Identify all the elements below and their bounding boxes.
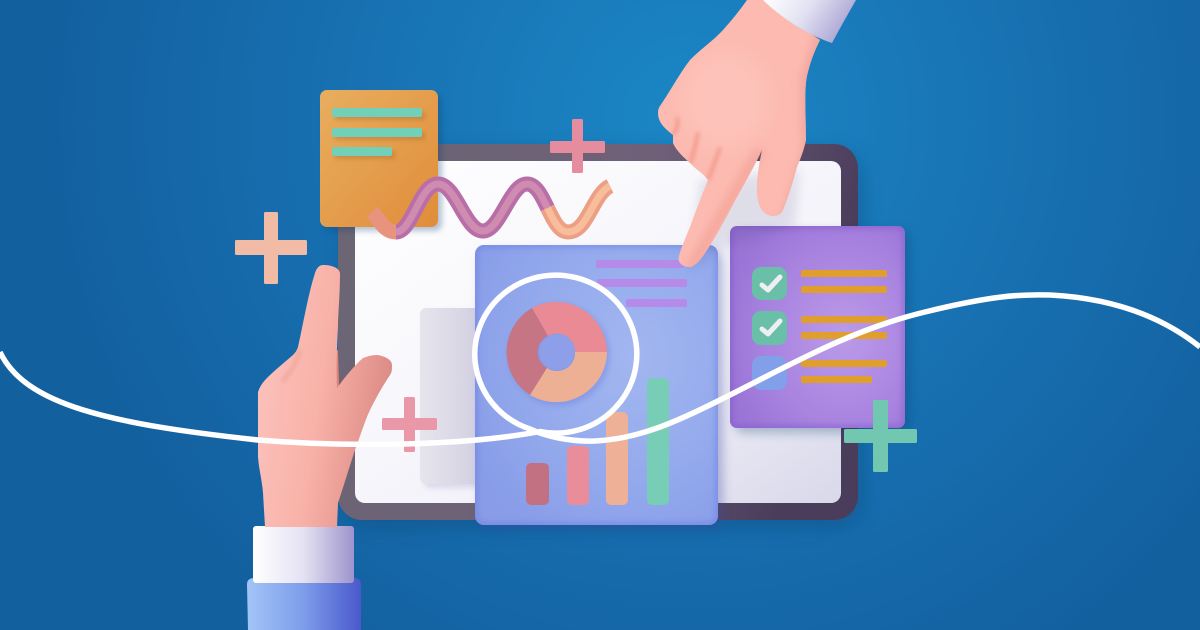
back grey card on screen	[420, 308, 490, 488]
plus: pink top	[550, 119, 605, 173]
donut slice: bottom	[530, 352, 607, 402]
bar chart	[526, 378, 669, 505]
note lines	[332, 108, 425, 159]
cuff	[253, 526, 354, 583]
tablet screen	[355, 161, 841, 503]
blue report card	[475, 245, 723, 529]
checkbox 2	[752, 311, 787, 345]
finger creases	[673, 117, 720, 180]
tablet frame	[338, 144, 858, 520]
white flowing line with circle loop	[0, 275, 1200, 444]
cuff	[763, 0, 856, 43]
report lines	[596, 260, 687, 307]
donut slice: top right	[532, 302, 607, 352]
plus: peach left	[235, 212, 307, 284]
plus: green	[844, 400, 917, 472]
hidden middle finger	[332, 350, 339, 392]
tablet	[338, 144, 861, 526]
donut chart	[507, 302, 610, 406]
palm and fingers	[258, 265, 392, 527]
sleeve	[247, 578, 361, 630]
wave ribbon	[372, 184, 610, 232]
top hand pointing	[658, 0, 856, 267]
checkbox 1	[752, 267, 787, 300]
donut slice: left	[507, 308, 548, 395]
orange note card	[320, 90, 442, 231]
checklist lines	[801, 270, 887, 383]
purple checklist card	[730, 226, 910, 433]
bottom hand	[247, 260, 400, 630]
checkbox 3	[752, 356, 787, 390]
plus: small pink on screen	[382, 397, 437, 452]
